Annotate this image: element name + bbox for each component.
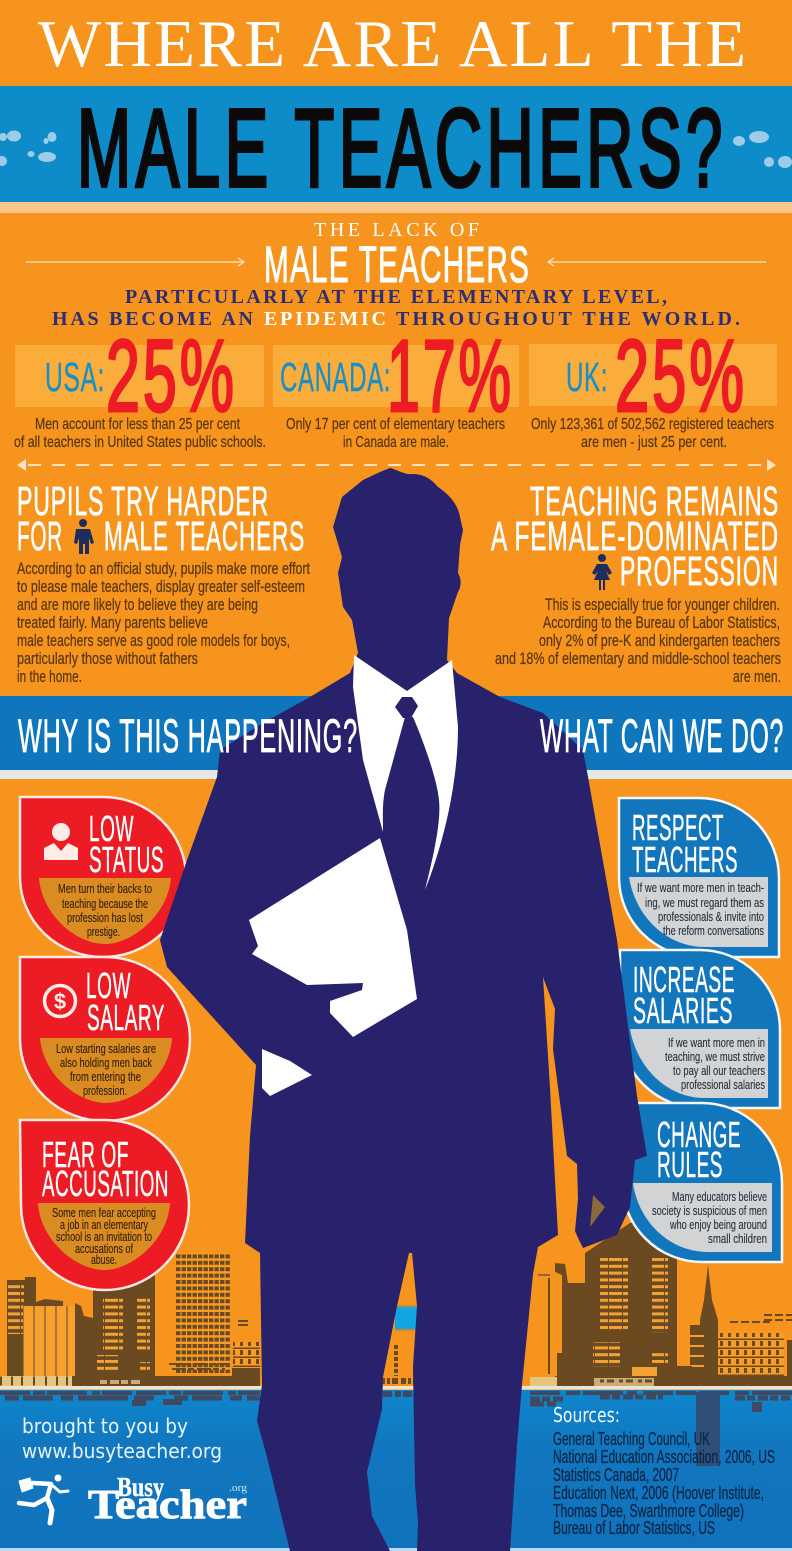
panel: USA stat: of all teachers in United States public schools. bbox=[14, 434, 266, 451]
sources list: Statistics Canada, 2007 bbox=[553, 1465, 679, 1485]
badge: low salary: LOW bbox=[86, 965, 131, 1006]
badge: low salary bbox=[20, 957, 190, 1121]
sources list bbox=[553, 1429, 775, 1538]
panel: USA stat: 25% bbox=[106, 319, 237, 433]
badge: low status: STATUS bbox=[89, 839, 164, 880]
text: pupils body bbox=[17, 559, 310, 686]
badge: fear of accusation: school is an invitation to bbox=[56, 1230, 152, 1244]
subheading: male teachers: MALE TEACHERS bbox=[264, 236, 530, 293]
panel: USA stat: USA: bbox=[45, 354, 105, 400]
necktie bbox=[395, 697, 418, 718]
subheading: particularly: PARTICULARLY AT THE ELEMENTARY LEVEL, bbox=[125, 286, 667, 308]
shirt bbox=[353, 655, 458, 890]
text: teaching body bbox=[495, 595, 781, 686]
heading: pupils try harder: FOR bbox=[17, 513, 63, 559]
badge: increase salaries: professional salaries bbox=[681, 1078, 765, 1092]
credit: brought to you by: brought to you by bbox=[22, 1414, 188, 1438]
subheading: epidemic line: HAS BECOME AN bbox=[52, 308, 254, 330]
badge: low status bbox=[20, 797, 186, 957]
icon: dollar coin bbox=[44, 986, 76, 1016]
text: pupils body: According to an official study, pupils make more effort bbox=[17, 559, 310, 578]
title band: male teachers bbox=[0, 86, 792, 213]
icon: male figure bbox=[74, 519, 94, 554]
badge: low salary: also holding men back bbox=[60, 1056, 153, 1070]
subheading: epidemic line: EPIDEMIC bbox=[264, 308, 386, 330]
badge: respect teachers bbox=[619, 798, 779, 957]
panel: Canada stat: 17% bbox=[387, 319, 514, 433]
badge: fear of accusation bbox=[20, 1120, 189, 1290]
badge: low salary: profession. bbox=[83, 1084, 127, 1098]
heading: pupils try harder: PUPILS TRY HARDER bbox=[17, 478, 269, 524]
skyline reflection bbox=[0, 1392, 792, 1466]
icon: running man logo bbox=[19, 1474, 68, 1523]
text: pupils body: in the home. bbox=[17, 667, 82, 686]
heading: pupils try harder: MALE TEACHERS bbox=[104, 513, 305, 559]
text: pupils body: male teachers serve as good role models for boys, bbox=[17, 631, 290, 650]
subheading: the lack of: THE LACK OF bbox=[314, 219, 479, 241]
badge: low salary: Low starting salaries are bbox=[56, 1042, 156, 1056]
badge: fear of accusation: Some men fear accepting bbox=[52, 1206, 156, 1220]
sources list: Bureau of Labor Statistics, US bbox=[553, 1518, 715, 1538]
section band: questions bbox=[0, 696, 792, 779]
badge: fear of accusation: ACCUSATION bbox=[42, 1163, 169, 1204]
badge: fear of accusation: FEAR OF bbox=[42, 1134, 129, 1175]
text: pupils body: particularly those without fathers bbox=[17, 649, 198, 668]
credit: brought to you by: www.busyteacher.org bbox=[22, 1439, 222, 1463]
arrow: left pointer bbox=[26, 258, 244, 266]
sources heading: Sources: bbox=[553, 1403, 620, 1427]
panel: Canada stat: in Canada are male. bbox=[343, 434, 449, 451]
heading: why is this happening: WHY IS THIS HAPPENING? bbox=[18, 709, 358, 762]
panel: Canada stat: CANADA: bbox=[280, 354, 391, 400]
logo: busy teacher: Teacher bbox=[88, 1481, 247, 1527]
panel: UK stat: UK: bbox=[566, 354, 608, 400]
subheading: epidemic line bbox=[52, 308, 740, 330]
hand gap bbox=[590, 1195, 605, 1227]
icon: footprints right bbox=[733, 131, 792, 168]
text: pupils body: treated fairly. Many parents believe bbox=[17, 613, 208, 632]
badge: low salary: SALARY bbox=[87, 997, 165, 1038]
badge: low status: LOW bbox=[89, 808, 134, 849]
credit: brought to you by bbox=[22, 1414, 222, 1463]
icon: footprints left bbox=[0, 130, 56, 166]
badge: change rules bbox=[622, 1103, 782, 1262]
subheading: epidemic line: THROUGHOUT THE WORLD. bbox=[396, 308, 740, 330]
skyline: right buildings bbox=[530, 1223, 792, 1386]
panel: Canada stat bbox=[273, 319, 519, 451]
panel: Canada stat: Only 17 per cent of elementary teachers bbox=[286, 416, 505, 433]
logo: busy teacher: .org bbox=[229, 1482, 248, 1494]
badge: change rules: RULES bbox=[657, 1144, 723, 1185]
badge: increase salaries bbox=[620, 950, 780, 1108]
badge: change rules: small children bbox=[708, 1232, 767, 1246]
silhouette: man in suit bbox=[160, 468, 647, 1551]
sources list: General Teaching Council, UK bbox=[553, 1429, 710, 1449]
badge: low salary: from entering the bbox=[70, 1070, 141, 1084]
panel: USA stat: Men account for less than 25 per cent bbox=[35, 416, 240, 433]
icon: female figure bbox=[592, 554, 612, 590]
badge: low status: Men turn their backs to bbox=[58, 882, 152, 896]
panel: UK stat bbox=[529, 319, 777, 451]
badge: fear of accusation: accusations of bbox=[75, 1242, 133, 1256]
skyline: center gap bbox=[380, 1305, 419, 1381]
arrow: right pointer bbox=[548, 258, 766, 266]
text: pupils body: to please male teachers, display greater self-esteem bbox=[17, 577, 305, 596]
panel: USA stat bbox=[14, 319, 266, 451]
arrow: dashed double-headed bbox=[17, 459, 776, 471]
badge: low status: prestige. bbox=[87, 925, 120, 939]
badge: fear of accusation: a job in an elementary bbox=[60, 1218, 149, 1232]
text: pupils body: and are more likely to believe they are being bbox=[17, 595, 258, 614]
title: where are all the: WHERE ARE ALL THE bbox=[38, 7, 746, 81]
heading: teaching remains bbox=[491, 478, 779, 594]
logo: busy teacher: Busy bbox=[117, 1472, 164, 1502]
skyline: left buildings bbox=[0, 1253, 260, 1386]
badge: low status: profession has lost bbox=[67, 911, 143, 925]
icon: dollar coin: $ bbox=[54, 989, 66, 1014]
badge: low status: teaching because the bbox=[62, 897, 148, 911]
water and footer background bbox=[0, 1386, 792, 1551]
folder bbox=[249, 838, 417, 1037]
icon: person bbox=[44, 823, 78, 860]
heading: pupils try harder bbox=[17, 478, 305, 559]
panel: UK stat: are men - just 25 per cent. bbox=[581, 434, 727, 451]
badge: fear of accusation: abuse. bbox=[91, 1253, 117, 1267]
pocket square bbox=[262, 1049, 312, 1096]
